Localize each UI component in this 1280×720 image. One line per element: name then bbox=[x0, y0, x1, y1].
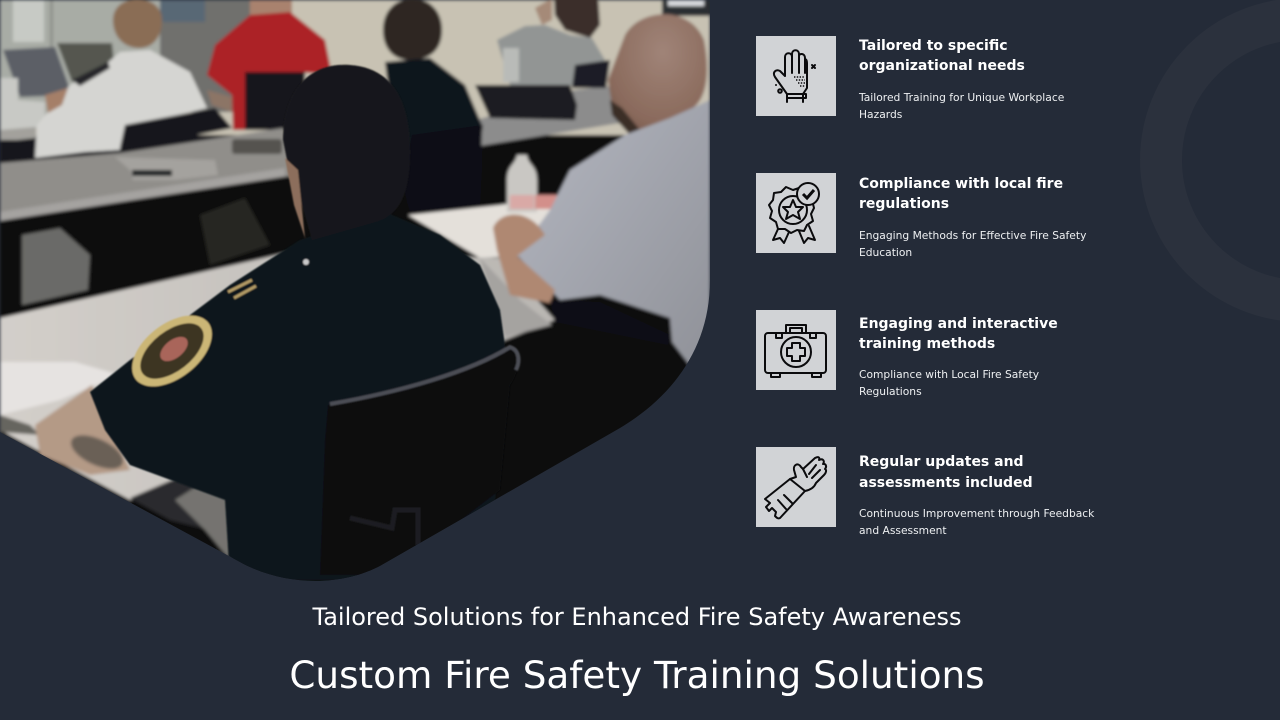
heading: assessments included bbox=[859, 475, 1033, 491]
heading: training methods bbox=[859, 336, 995, 352]
back table, left bbox=[0, 127, 36, 142]
description: and Assessment bbox=[859, 524, 947, 537]
icon: first aid kit bbox=[756, 310, 836, 390]
feature 4: regular updates bbox=[756, 447, 1095, 537]
shoulder patch bbox=[130, 314, 214, 388]
description: Compliance with Local Fire Safety bbox=[859, 368, 1039, 381]
wall bbox=[0, 0, 710, 135]
white shirt attendee bbox=[35, 0, 207, 158]
icon: protective glove bbox=[756, 447, 836, 527]
subtitle: Tailored Solutions for Enhanced Fire Safety Awareness bbox=[312, 603, 961, 631]
heading: Compliance with local fire bbox=[859, 176, 1063, 192]
heading: Tailored to specific bbox=[859, 38, 1008, 54]
laptops bbox=[3, 47, 72, 97]
front table bbox=[0, 252, 555, 500]
description: Tailored Training for Unique Workplace bbox=[858, 91, 1064, 104]
title: Custom Fire Safety Training Solutions bbox=[289, 653, 985, 697]
description: Continuous Improvement through Feedback bbox=[859, 507, 1095, 520]
feature 3: engaging methods bbox=[756, 310, 1058, 398]
photo: fire safety training classroom bbox=[0, 0, 710, 600]
arm with tattoo bbox=[35, 385, 130, 475]
heading: Regular updates and bbox=[859, 454, 1024, 470]
middle table bbox=[0, 128, 300, 220]
description: Education bbox=[859, 246, 912, 259]
right man bbox=[493, 14, 710, 376]
bag bbox=[475, 85, 577, 120]
under table floor and legs bbox=[0, 176, 290, 318]
description: Hazards bbox=[859, 108, 903, 121]
icon: safety glove bbox=[756, 36, 836, 116]
icon: award rosette with check bbox=[756, 173, 836, 253]
feature 1: tailored to needs bbox=[756, 36, 1064, 121]
decorative ring bbox=[1161, 19, 1280, 301]
heading: Engaging and interactive bbox=[859, 316, 1058, 332]
dark shirt attendee bbox=[383, 0, 483, 212]
description: Engaging Methods for Effective Fire Safety bbox=[859, 229, 1086, 242]
feature 2: compliance bbox=[756, 173, 1086, 259]
red shirt attendee bbox=[120, 0, 332, 150]
description: Regulations bbox=[859, 385, 922, 398]
back table, right bbox=[470, 86, 626, 146]
heading: regulations bbox=[859, 196, 949, 212]
bottle and papers bbox=[406, 200, 552, 260]
office chair bbox=[320, 347, 518, 575]
grey shirt attendee bbox=[497, 0, 610, 88]
heading: organizational needs bbox=[859, 58, 1025, 74]
foreground officer bbox=[90, 212, 505, 580]
